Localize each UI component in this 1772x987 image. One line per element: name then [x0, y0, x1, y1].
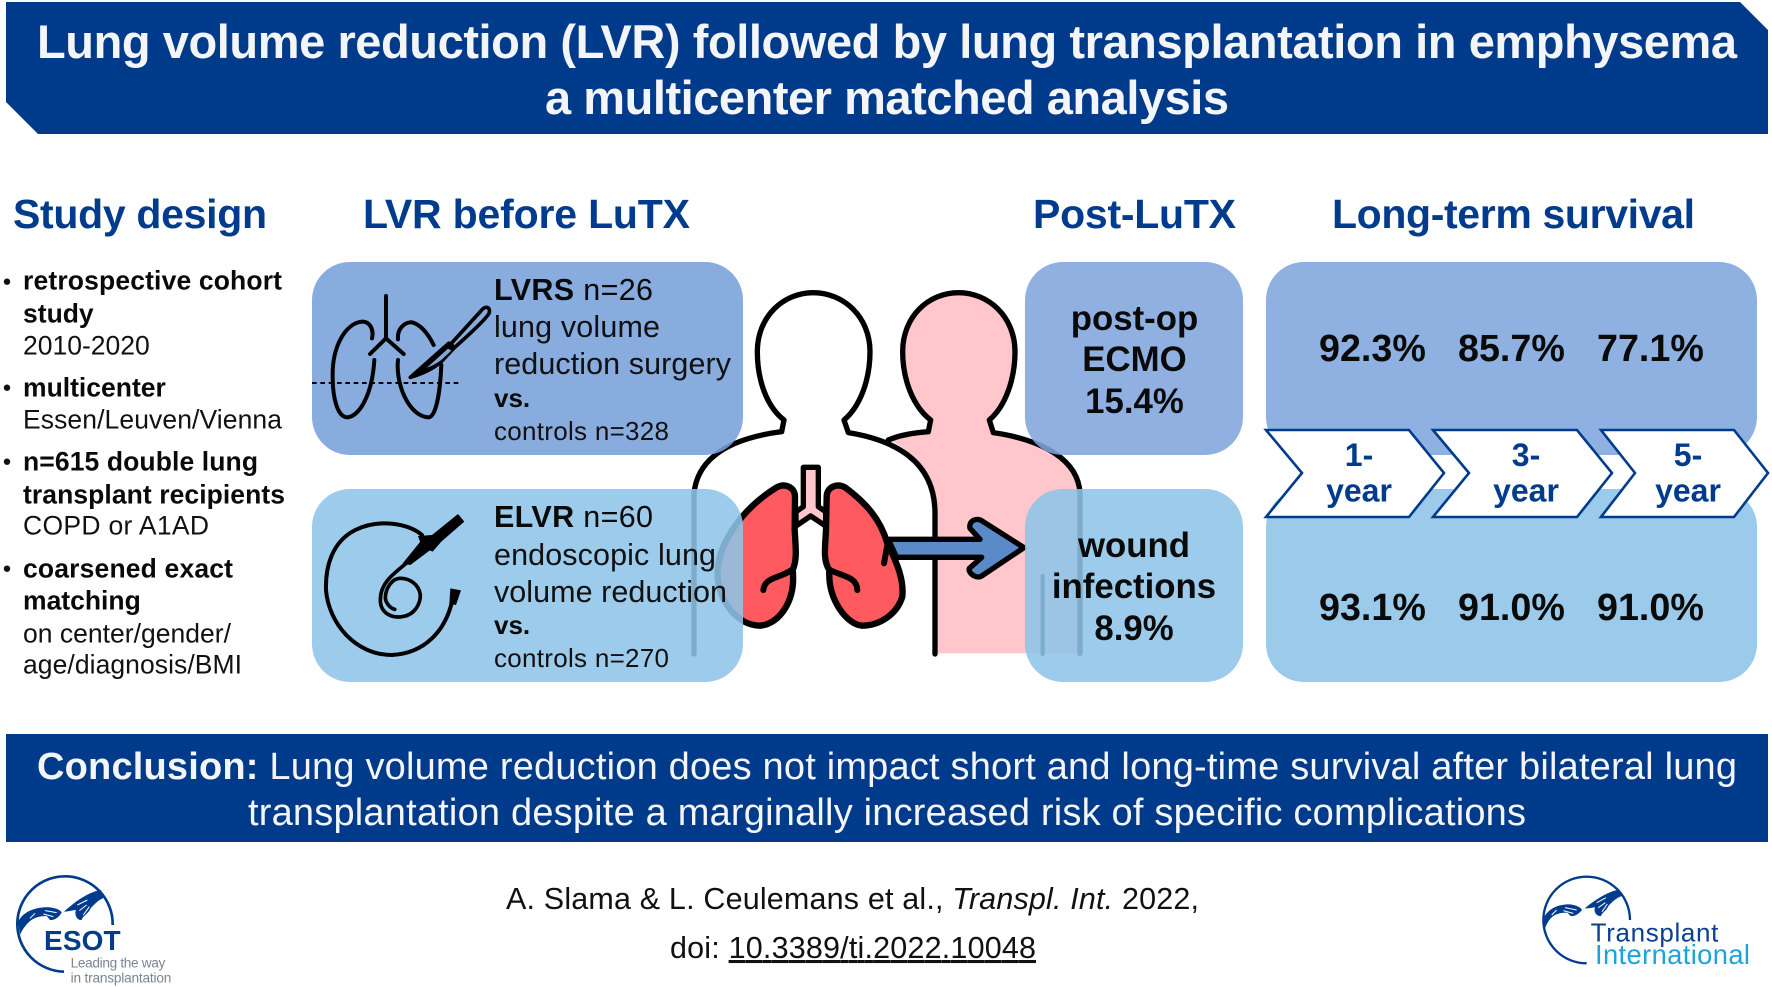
chevron: 5-year: year	[1655, 472, 1721, 508]
panel: post-op ECMO: post-op	[1071, 299, 1198, 338]
conclusion banner: transplantation despite a marginally increased risk of specific complications	[248, 792, 1526, 834]
heading: long-term survival: Long-term survival	[1332, 191, 1695, 237]
LVRS text	[494, 273, 732, 446]
study design bullet list: matching	[23, 586, 141, 616]
title banner	[6, 2, 1768, 134]
chevron: 1-year: year	[1326, 472, 1392, 508]
panel: wound infections: infections	[1052, 567, 1216, 606]
ELVR text: controls n=270	[494, 643, 669, 673]
panel: LVRS	[312, 262, 743, 455]
chevron: 1-year: 1-	[1345, 437, 1373, 473]
logo: ESOT: ESOT	[44, 925, 121, 956]
citation: doi: 10.3389/ti.2022.10048	[670, 931, 1036, 965]
logo: Transplant International: Transplant	[1591, 918, 1719, 948]
icon: endoscope	[326, 514, 464, 655]
panel: long-term survival LVRS: 85.7%	[1458, 327, 1565, 369]
study design bullet list: Essen/Leuven/Vienna	[23, 405, 282, 435]
study design bullet list: study	[23, 299, 94, 329]
LVRS text: lung volume	[494, 310, 660, 344]
arrow	[888, 519, 1024, 577]
ELVR text	[494, 500, 727, 673]
study design bullet list: age/diagnosis/BMI	[23, 650, 242, 680]
panel: post-op ECMO: ECMO	[1082, 340, 1187, 379]
donor silhouette: white	[694, 293, 935, 654]
study design bullet list: retrospective cohort	[23, 266, 282, 296]
heading: LVR before LuTX: LVR before LuTX	[363, 191, 690, 237]
ELVR text: vs.	[494, 610, 530, 640]
panel: long-term survival ELVR	[1266, 489, 1757, 682]
ELVR text: volume reduction	[494, 575, 727, 609]
logo: Transplant International	[1543, 877, 1750, 970]
heading: study design: Study design	[13, 191, 267, 237]
LVRS text: vs.	[494, 383, 530, 413]
panel: long-term survival ELVR: 93.1%	[1319, 586, 1426, 628]
citation	[506, 882, 1199, 965]
trachea	[796, 467, 826, 526]
study design bullet list: multicenter	[23, 373, 166, 403]
panel: post-op ECMO	[1025, 262, 1243, 455]
ELVR text: ELVR n=60	[494, 500, 653, 534]
study design bullet list: transplant recipients	[23, 480, 285, 510]
recipient silhouette: pink	[888, 293, 1080, 654]
chevron: 1-year	[1266, 430, 1444, 517]
conclusion banner: Conclusion: Lung volume reduction does not impact short and long-time survival after bilateral lung	[37, 746, 1737, 788]
title banner: Lung volume reduction (LVR) followed by lung transplantation in emphysema	[37, 15, 1738, 68]
chevron: 3-year: 3-	[1512, 437, 1540, 473]
LVRS text: LVRS n=26	[494, 273, 653, 307]
LVRS text: reduction surgery	[494, 347, 732, 381]
study design bullet list: coarsened exact	[23, 554, 233, 584]
logo: ESOT: Leading the way	[71, 955, 166, 970]
logo: Transplant International: International	[1595, 939, 1750, 970]
panel: wound infections	[1025, 489, 1243, 682]
LVRS text: controls n=328	[494, 416, 669, 446]
panel: long-term survival LVRS: 77.1%	[1597, 327, 1704, 369]
chevron: 3-year	[1433, 430, 1612, 517]
chevron: 3-year: year	[1493, 472, 1559, 508]
study design bullet list: on center/gender/	[23, 619, 232, 649]
panel: long-term survival LVRS	[1266, 262, 1757, 455]
study design bullet list: COPD or A1AD	[23, 511, 209, 541]
panel: long-term survival ELVR: 91.0%	[1458, 586, 1565, 628]
study design bullet list	[4, 266, 285, 680]
ELVR text: endoscopic lung	[494, 538, 716, 572]
panel: wound infections: wound	[1077, 526, 1190, 565]
panel: long-term survival ELVR: 91.0%	[1597, 586, 1704, 628]
citation: A. Slama & L. Ceulemans et al., Transpl. Int. 2022,	[506, 882, 1199, 916]
logo: ESOT: in transplantation	[71, 971, 171, 986]
icon: lungs with scalpel	[312, 296, 489, 417]
right lung	[825, 486, 903, 626]
panel: long-term survival LVRS: 92.3%	[1319, 327, 1426, 369]
panel: wound infections: 8.9%	[1094, 609, 1174, 648]
left lung	[718, 486, 796, 626]
illustration: two people with lungs	[694, 293, 1080, 654]
panel: ELVR	[312, 489, 743, 682]
title banner: a multicenter matched analysis	[545, 71, 1229, 124]
chevron: 5-year	[1601, 430, 1768, 517]
study design bullet list: 2010-2020	[23, 331, 150, 361]
heading: Post-LuTX: Post-LuTX	[1033, 191, 1236, 237]
logo: ESOT	[17, 876, 171, 986]
study design bullet list: n=615 double lung	[23, 447, 258, 477]
panel: post-op ECMO: 15.4%	[1085, 382, 1184, 421]
chevron: 5-year: 5-	[1674, 437, 1702, 473]
conclusion banner	[6, 734, 1768, 842]
